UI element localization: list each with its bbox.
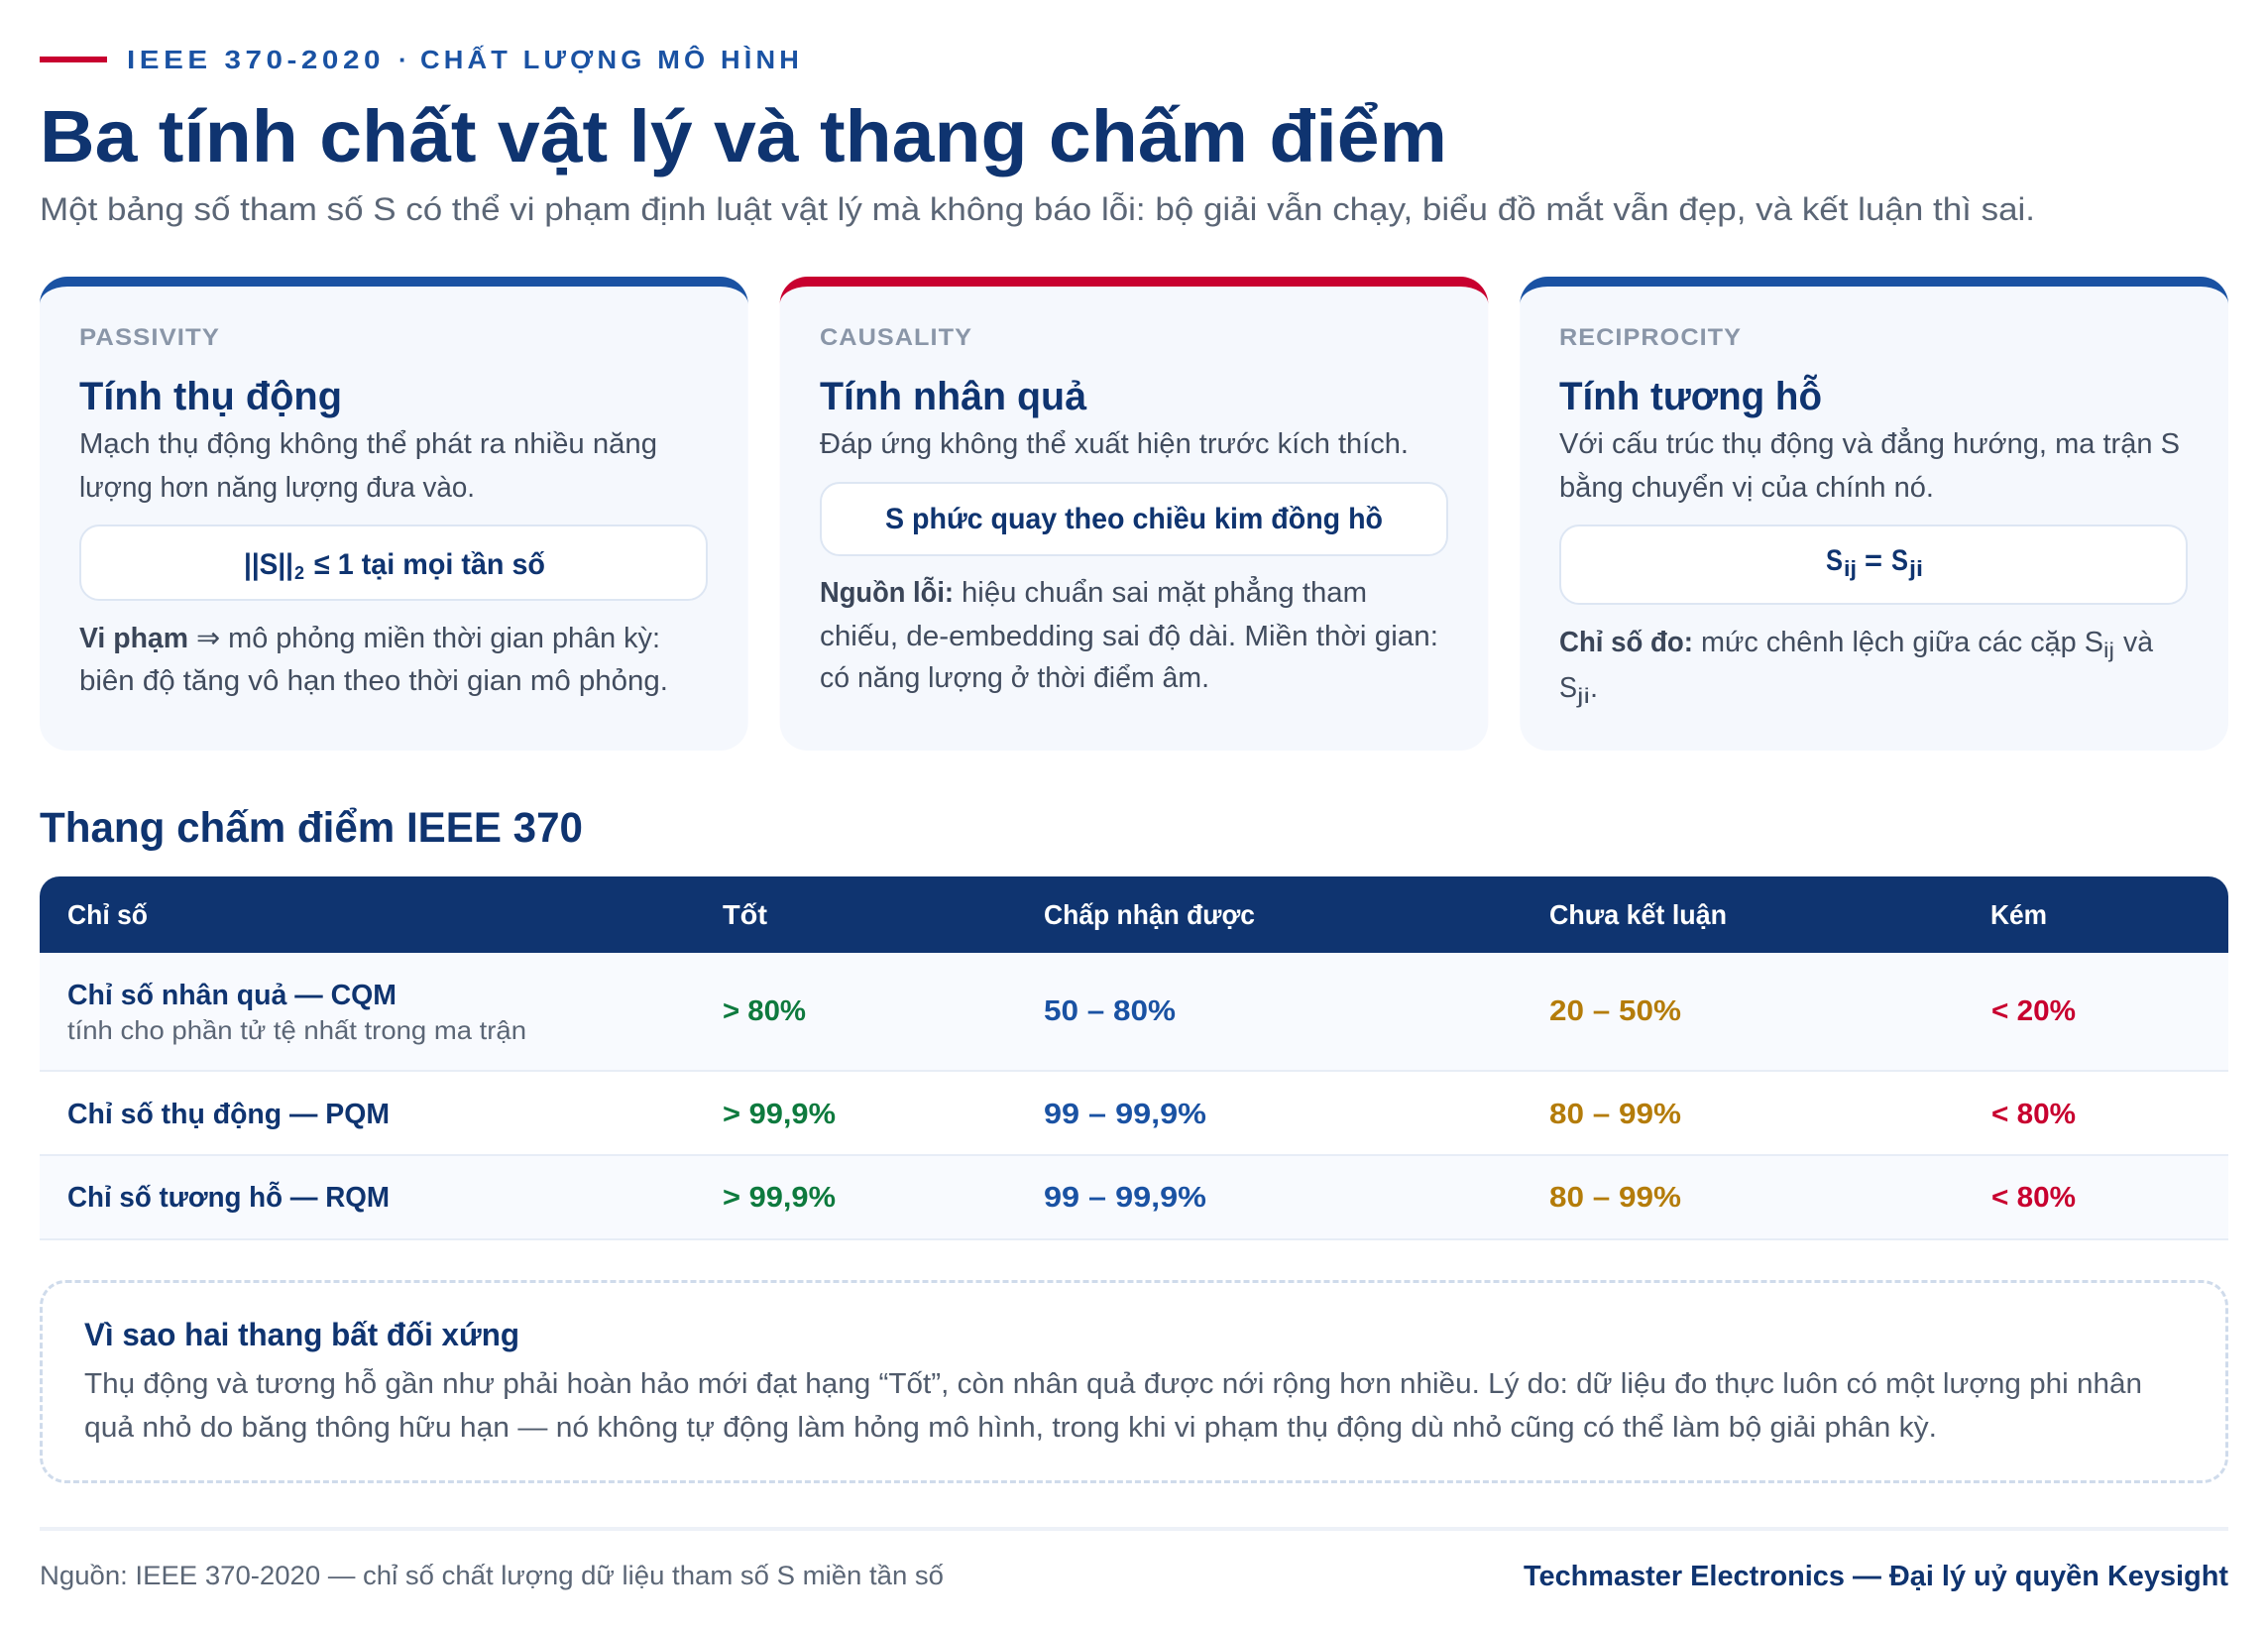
- formula box: [1560, 525, 2187, 604]
- metric note: ji: [1576, 685, 1590, 708]
- card background: [40, 287, 748, 751]
- violation note: Vi phạm: [79, 623, 188, 654]
- table header: Chấp nhận được: [1044, 899, 1255, 930]
- eyebrow: CHẤT LƯỢNG MÔ HÌNH: [420, 45, 803, 74]
- callout text: quả nhỏ do băng thông hữu hạn — nó không tự động làm hỏng mô hình, trong khi vi phạm thụ động dù nhỏ cũng có thể làm bộ giải phân kỳ.: [84, 1412, 1937, 1444]
- card description: bằng chuyển vị của chính nó.: [1559, 471, 1934, 504]
- header: [40, 45, 2035, 227]
- formula box: 2: [294, 563, 304, 583]
- violation note: ⇒ mô phỏng miền thời gian phân kỳ:: [196, 623, 660, 654]
- error source note: chiếu, de-embedding sai độ dài. Miền thời gian:: [820, 621, 1438, 652]
- card top accent: [780, 277, 1488, 304]
- table row: CQM: Chỉ số nhân quả — CQM: [67, 980, 397, 1011]
- table row: CQM: tính cho phần tử tệ nhất trong ma trận: [67, 1015, 526, 1045]
- table row: PQM: > 99,9%: [723, 1099, 836, 1130]
- error source note: [820, 575, 1438, 694]
- card background: [780, 287, 1488, 751]
- card description: Với cấu trúc thụ động và đẳng hướng, ma trận S: [1559, 426, 2180, 460]
- eyebrow: IEEE 370-2020: [127, 45, 385, 74]
- metric note: và: [2123, 627, 2154, 658]
- table row: RQM: 80 – 99%: [1549, 1182, 1681, 1214]
- card description: [79, 428, 657, 504]
- formula box: S phức quay theo chiều kim đồng hồ: [885, 503, 1383, 535]
- card heading: Tính nhân quả: [820, 375, 1087, 418]
- table row: PQM: 99 – 99,9%: [1044, 1099, 1206, 1130]
- panel: causality: [780, 277, 1488, 751]
- card label: PASSIVITY: [79, 324, 220, 351]
- table row: CQM: < 20%: [1991, 995, 2076, 1027]
- formula box: ≤ 1 tại mọi tần số: [314, 548, 545, 581]
- table header: [40, 876, 2228, 953]
- card top accent: [40, 277, 748, 304]
- table: scoring: [40, 876, 2228, 1240]
- error source note: hiệu chuẩn sai mặt phẳng tham: [962, 575, 1367, 609]
- table row: PQM: Chỉ số thụ động — PQM: [67, 1099, 390, 1130]
- card label: CAUSALITY: [820, 324, 972, 351]
- card description: lượng hơn năng lượng đưa vào.: [79, 472, 475, 504]
- brand: Techmaster Electronics — Đại lý uỷ quyền Keysight: [1524, 1561, 2228, 1592]
- formula box: S: [1891, 544, 1908, 577]
- formula box: [821, 483, 1447, 555]
- table header: Kém: [1990, 899, 2047, 930]
- eyebrow: ·: [398, 45, 407, 74]
- formula box: S: [1826, 544, 1843, 577]
- formula box: =: [1865, 544, 1882, 577]
- table header: Chỉ số: [67, 899, 148, 930]
- callout: asymmetry note: [42, 1281, 2226, 1481]
- error source note: có năng lượng ở thời điểm âm.: [820, 662, 1209, 694]
- callout heading: Vì sao hai thang bất đối xứng: [84, 1317, 519, 1352]
- table row: PQM: < 80%: [1991, 1099, 2076, 1130]
- callout text: Thụ động và tương hỗ gần như phải hoàn hảo mới đạt hạng “Tốt”, còn nhân quả được nới rộng hơn nhiều. Lý do: dữ liệu đo thực luôn có một lượng phi nhân: [84, 1367, 2142, 1400]
- error source note: Nguồn lỗi:: [820, 575, 954, 609]
- metric note: mức chênh lệch giữa các cặp S: [1701, 627, 2103, 658]
- table row: RQM: 99 – 99,9%: [1044, 1182, 1206, 1214]
- metric note: .: [1590, 672, 1598, 704]
- card background: [1520, 287, 2228, 751]
- table header: Tốt: [723, 899, 767, 930]
- table row: RQM: [40, 1156, 2228, 1240]
- formula box: ij: [1844, 556, 1857, 581]
- callout text: [84, 1367, 2142, 1444]
- panel: passivity: [40, 277, 748, 751]
- formula box: ||S||: [244, 548, 293, 581]
- table row: RQM: Chỉ số tương hỗ — RQM: [67, 1180, 390, 1214]
- section heading: Thang chấm điểm IEEE 370: [40, 804, 583, 852]
- title: Ba tính chất vật lý và thang chấm điểm: [40, 95, 1447, 177]
- card heading: Tính thụ động: [79, 375, 342, 418]
- eyebrow: [127, 45, 803, 74]
- violation note: [79, 623, 668, 697]
- card label: RECIPROCITY: [1559, 324, 1742, 351]
- card description: Đáp ứng không thể xuất hiện trước kích thích.: [820, 428, 1409, 460]
- table header: Chưa kết luận: [1549, 899, 1727, 930]
- table row: RQM: < 80%: [1991, 1182, 2076, 1214]
- formula box: [80, 525, 707, 600]
- table row: CQM: [40, 953, 2228, 1072]
- violation note: biên độ tăng vô hạn theo thời gian mô phỏng.: [79, 665, 668, 697]
- table row: PQM: 80 – 99%: [1549, 1099, 1681, 1130]
- metric note: S: [1559, 672, 1577, 704]
- formula box: ji: [1908, 556, 1923, 581]
- table row: PQM: [40, 1072, 2228, 1156]
- metric note: ij: [2103, 640, 2114, 662]
- footer: [40, 1527, 2228, 1592]
- table row: CQM: 50 – 80%: [1044, 995, 1176, 1027]
- card top accent: [1520, 277, 2228, 304]
- panel: reciprocity: [1520, 277, 2228, 751]
- subtitle: Một bảng số tham số S có thể vi phạm định luật vật lý mà không báo lỗi: bộ giải vẫn chạy, biểu đồ mắt vẫn đẹp, và kết luận thì sai.: [40, 191, 2035, 227]
- metric note: [1559, 627, 2154, 708]
- table row: CQM: > 80%: [723, 995, 806, 1027]
- table row: CQM: 20 – 50%: [1549, 995, 1681, 1027]
- source: Nguồn: IEEE 370-2020 — chỉ số chất lượng dữ liệu tham số S miền tần số: [40, 1561, 944, 1590]
- table row: RQM: > 99,9%: [723, 1182, 836, 1214]
- card description: [1559, 426, 2180, 504]
- card heading: Tính tương hỗ: [1559, 373, 1822, 418]
- metric note: Chỉ số đo:: [1559, 627, 1693, 658]
- eyebrow rule: [40, 57, 107, 62]
- card description: Mạch thụ động không thể phát ra nhiều năng: [79, 428, 657, 460]
